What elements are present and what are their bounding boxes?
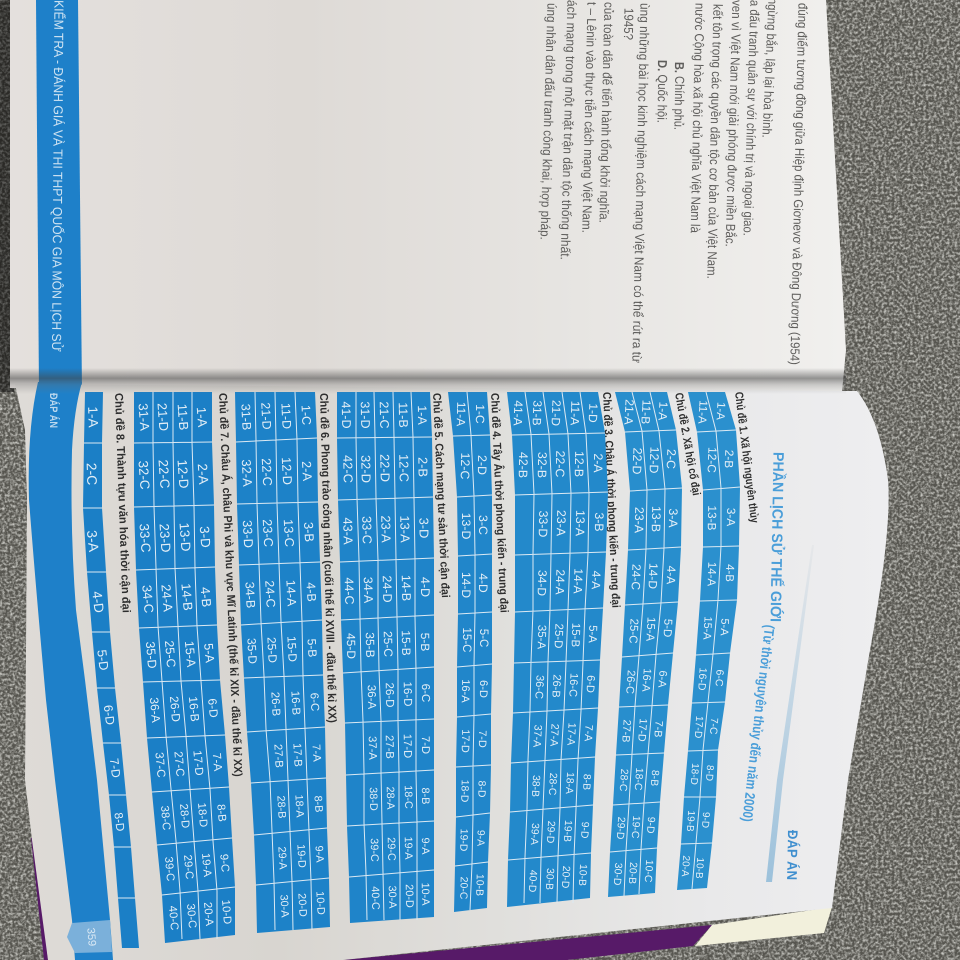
panel: topic 1 answers: 15-A [700, 616, 714, 641]
panel: topic 6 answers: 18-A [292, 794, 306, 819]
panel: topic 8 answers: 2-C [84, 463, 100, 485]
panel: topic 7 answers: 19-A [199, 853, 213, 878]
panel: topic 5 answers: 44-C [342, 577, 356, 605]
panel: topic 2 answers: 23-A [632, 507, 646, 534]
panel: topic 5 answers: 28-A [384, 786, 396, 810]
panel: topic 7 answers: 36-A [147, 697, 163, 723]
panel: topic 2 answers [608, 392, 702, 897]
panel: topic 5 answers: 40-C [369, 886, 381, 910]
panel: topic 7 answers: 26-D [167, 695, 183, 723]
upper page questions text: D. Quốc hội. [654, 60, 670, 123]
panel: topic 4 answers: 5-C [477, 629, 489, 647]
panel: topic 2 answers: 14-D [646, 563, 660, 590]
panel: topic 5 answers: 26-D [383, 682, 395, 708]
page heading: PHẦN LỊCH SỬ THẾ GIỚI [767, 452, 787, 622]
page heading [739, 452, 787, 823]
panel: topic 5 answers: 20-D [403, 884, 415, 908]
panel: topic 6 answers: 7-A [310, 744, 322, 763]
panel: topic 3 answers: 41-A [511, 400, 525, 426]
panel: topic 5 answers: 6-C [419, 684, 431, 702]
panel: topic 3 answers: 9-D [578, 821, 590, 839]
upper page side band [36, 0, 82, 392]
panel: topic 5 answers: 8-B [419, 787, 431, 805]
panel: topic 6 answers: 15-D [284, 636, 300, 663]
panel: topic 4 answers: 19-D [457, 829, 469, 852]
panel: topic 3 answers: 1-D [586, 403, 600, 423]
panel: topic 7 answers: 2-A [195, 463, 211, 485]
panel: topic 6 answers: 29-A [275, 846, 289, 871]
panel: topic 8 answers: 3-A [84, 529, 102, 553]
band label: đáp án: ĐÁP ÁN [47, 393, 60, 428]
panel: topic 5 answers: 35-B [363, 632, 377, 658]
panel: topic 5 answers: 31-D [358, 401, 372, 429]
panel: topic 7 answers: 39-C [162, 856, 176, 882]
panel: topic 3 answers: 3-B [592, 512, 606, 532]
panel: topic 8 answers: 5-D [94, 649, 112, 671]
panel: topic 4 answers: 17-D [459, 729, 471, 753]
panel: topic 3 answers: 30-B [543, 868, 555, 890]
panel: topic 6 answers: 11-D [278, 403, 294, 429]
panel: topic 5 answers: 14-B [399, 575, 413, 601]
panel: topic 7 answers: 31-A [136, 403, 152, 432]
panel: topic 5 answers [337, 392, 451, 923]
panel: topic 7 answers: 40-C [166, 905, 180, 931]
panel: topic 2 answers: 27-B [619, 719, 633, 743]
panel: topic 5 answers: 38-D [367, 787, 379, 811]
panel: topic 7 answers: 3-D [197, 526, 213, 549]
panel: topic 5 answers: 17-D [401, 734, 413, 758]
panel: topic 3 answers: 29-D [544, 820, 556, 844]
panel: topic 2 answers: 26-C [623, 670, 637, 694]
panel: topic 8 answers [83, 392, 139, 948]
panel: topic 7 answers: 20-A [201, 902, 215, 927]
panel: topic 7 answers [134, 392, 244, 943]
panel: topic 3 answers: 4-A [589, 570, 603, 590]
panel: topic 5 answers: 12-C [396, 454, 412, 482]
panel: topic 3 answers: 31-B [530, 400, 544, 426]
panel: topic 6 answers: 32-A [239, 459, 255, 487]
panel: topic 1 answers: 12-C [705, 447, 719, 474]
panel: topic 7 answers: 8-B [214, 804, 228, 822]
panel: topic 5 answers: 1-A [415, 405, 429, 426]
upper page questions text: đúng điểm tương đồng giữa Hiệp định Giơnevơ và Đông Dương (1954) [787, 3, 810, 365]
panel: topic 2 answers: 15-A [643, 617, 657, 642]
panel: topic 5 answers: 30-A [386, 885, 398, 909]
panel: topic 1 answers: 17-D [692, 715, 704, 739]
panel: topic 1 answers: 19-B [684, 810, 696, 832]
panel: topic 3 answers: 16-C [566, 673, 580, 697]
topic 2 title: Chủ đề 2. Xã hội cổ đại [672, 392, 702, 496]
panel: topic 3 answers: 36-C [532, 675, 546, 699]
panel: topic 5 answers: 45-D [344, 633, 358, 659]
panel: topic 6 answers: 16-B [288, 691, 302, 716]
panel: topic 3 answers: 19-B [561, 820, 573, 842]
panel: topic 3 answers: 25-D [552, 623, 564, 649]
panel: topic 6 answers: 26-B [268, 692, 282, 717]
panel: topic 6 answers: 24-C [262, 580, 278, 608]
panel: topic 6 answers: 10-D [313, 891, 327, 915]
panel: topic 3 answers: 14-A [571, 568, 585, 594]
upper page questions text: B. Chính phủ. [671, 62, 687, 130]
panel: topic 2 answers: 3-A [666, 508, 680, 528]
panel: topic 5 answers: 24-D [380, 575, 394, 603]
panel: topic 6 answers: 28-B [274, 795, 288, 819]
panel: topic 5 answers: 32-D [358, 455, 374, 483]
panel: topic 5 answers: 4-D [418, 577, 432, 597]
panel: topic 6 answers: 2-A [299, 461, 315, 482]
panel: topic 6 answers: 3-B [301, 522, 317, 542]
page number tab: 359 [84, 927, 98, 947]
panel: topic 4 answers: 9-A [474, 830, 486, 846]
panel: topic 3 answers: 5-A [586, 625, 598, 643]
panel: topic 4 answers: 1-C [473, 404, 487, 424]
purple book cover edge [31, 838, 712, 960]
panel: topic 2 answers: 1-A [656, 401, 670, 421]
panel: topic 6 answers: 5-B [305, 638, 319, 658]
panel: topic 7 answers: 4-B [198, 586, 214, 608]
upper page questions text: ùng những bài học kinh nghiệm cách mạng Việt Nam có thể rút ra từ [629, 3, 652, 363]
upper page questions text: ngừng bắn, lập lại hòa bình. [759, 0, 780, 138]
panel: topic 5 answers: 13-A [397, 515, 413, 543]
panel: topic 2 answers: 17-D [635, 718, 649, 742]
decorative page rule [766, 545, 814, 882]
panel: topic 3 answers: 10-B [576, 864, 588, 886]
panel: topic 3 answers: 24-A [553, 569, 567, 595]
panel: topic 7 answers: 24-A [158, 584, 176, 613]
panel: topic 8 answers: 7-D [107, 757, 123, 779]
panel: topic 2 answers: 9-D [644, 816, 656, 834]
panel: topic 3 answers: 33-D [536, 510, 550, 538]
upper page questions text: kết tôn trọng các quyền dân tộc cơ bản của Việt Nam. [704, 4, 725, 279]
band label: KIỂM TRA - ĐÁNH GIÁ VÀ THI THPT QUỐC GIA MÔN LỊCH SỬ [49, 0, 66, 352]
cream sheet under page [695, 907, 832, 946]
panel: topic 3 answers: 40-D [526, 869, 538, 893]
panel: topic 4 answers: 13-D [459, 513, 473, 539]
panel: topic 7 answers: 35-D [143, 641, 159, 669]
panel: topic 2 answers: 18-C [632, 767, 644, 791]
panel: topic 7 answers: 14-B [178, 583, 196, 611]
panel: topic 4 answers: 10-B [473, 874, 485, 896]
panel: topic 3 answers: 42-B [516, 452, 530, 478]
panel: topic 3 answers: 27-A [547, 723, 561, 747]
upper page questions text: của toàn dân để tiến hành tổng khởi nghĩa. [596, 2, 616, 223]
panel: topic 2 answers: 19-C [629, 815, 641, 839]
topic 1 title: Chủ đề 1. Xã hội nguyên thủy [732, 391, 760, 524]
panel: topic 4 answers: 14-D [459, 572, 473, 598]
panel: topic 2 answers: 10-C [642, 859, 654, 883]
panel: topic 8 answers: 4-D [89, 590, 107, 614]
panel: topic 7 answers: 33-C [137, 523, 154, 553]
panel: topic 4 answers: 4-D [476, 573, 490, 593]
panel: topic 4 answers: 2-D [475, 455, 489, 475]
panel: topic 6 answers: 22-C [259, 458, 275, 486]
panel: topic 1 answers: 2-B [722, 450, 736, 469]
book spine crease shadow [10, 368, 846, 394]
panel: topic 2 answers: 16-A [639, 668, 653, 693]
panel: topic 4 answers: 8-D [475, 780, 487, 798]
panel: topic 6 answers: 14-A [283, 579, 299, 607]
panel: topic 7 answers: 6-D [205, 698, 221, 719]
panel: topic 3 answers: 13-A [573, 510, 587, 537]
panel: topic 4 answers: 3-C [476, 515, 490, 535]
panel: topic 7 answers: 25-C [162, 640, 178, 668]
panel: topic 3 answers: 7-A [582, 724, 594, 742]
panel: topic 3 answers: 15-B [569, 623, 581, 648]
panel: topic 7 answers: 5-A [201, 643, 217, 664]
panel: topic 5 answers: 21-C [377, 401, 391, 429]
panel: topic 1 answers [677, 391, 760, 890]
upper page questions text: 1945? [621, 8, 636, 40]
panel: topic 7 answers: 17-D [190, 750, 206, 776]
panel: topic 7 answers: 30-C [184, 903, 198, 929]
panel: topic 3 answers: 28-C [546, 772, 558, 796]
panel: topic 6 answers: 8-B [312, 795, 324, 813]
panel: topic 5 answers: 5-B [418, 633, 432, 651]
panel: topic 3 answers: 26-B [549, 674, 563, 698]
panel: topic 7 answers: 28-D [177, 803, 191, 829]
upper page questions text: nước Cộng hòa xã hội chủ nghĩa Việt Nam là [688, 3, 707, 234]
panel: topic 5 answers: 3-D [416, 518, 432, 538]
upper page questions text: a đấu tranh quân sự với chính trị và ngoại giao. [741, 0, 762, 236]
panel: topic 5 answers: 9-A [419, 837, 431, 855]
panel: lower answer page [15, 382, 889, 960]
panel: topic 2 answers: 13-B [649, 506, 663, 532]
panel: topic 4 answers: 16-A [459, 679, 471, 703]
panel: topic 5 answers: 22-D [377, 454, 393, 482]
panel: topic 7 answers: 1-A [194, 406, 210, 428]
panel: topic 4 answers: 7-D [476, 730, 488, 748]
topic 3 title: Chủ đề 3. Châu Á thời phong kiến - trung đại [600, 392, 622, 608]
panel: topic 6 answers: 33-D [240, 520, 256, 548]
panel: topic 6 answers: 6-C [308, 692, 320, 712]
panel: topic 7 answers: 22-C [156, 459, 173, 489]
upper page questions text: úng nhân dân đấu tranh công khai, hợp pháp. [537, 3, 559, 240]
topic 8 title: Chủ đề 8. Thành tựu văn hóa thời cận đại [112, 393, 132, 613]
panel: topic 7 answers: 37-C [152, 752, 168, 778]
panel: topic 6 answers: 12-D [279, 457, 295, 485]
panel: topic 1 answers: 10-B [693, 857, 705, 879]
panel: topic 5 answers: 29-C [385, 837, 397, 861]
panel: topic 3 answers: 21-D [549, 400, 563, 427]
panel: topic 2 answers: 22-D [630, 447, 644, 475]
panel: topic 4 answers: 6-D [477, 680, 489, 698]
panel: topic 5 answers: 37-A [366, 736, 378, 760]
panel: topic 8 answers: 1-A [85, 406, 101, 428]
panel: topic 7 answers: 29-C [181, 854, 195, 880]
panel: upper page [10, 0, 846, 392]
panel: topic 3 answers [507, 392, 622, 907]
panel: topic 6 answers: 13-C [281, 519, 297, 547]
lower page side band [29, 382, 113, 960]
panel: topic 6 answers: 1-C [298, 405, 314, 425]
page heading: (Từ thời nguyên thủy đến năm 2000) [739, 624, 778, 823]
panel: topic 6 answers: 17-B [290, 743, 304, 767]
panel: topic 2 answers: 30-D [611, 862, 623, 886]
panel: topic 7 answers: 38-C [158, 805, 172, 831]
panel: topic 3 answers: 23-A [554, 510, 568, 537]
panel: topic 6 answers: 9-A [313, 845, 325, 864]
panel: topic 5 answers: 34-A [361, 577, 375, 604]
upper page questions text: ách mạng trong một mặt trận dân tộc thống nhất. [558, 0, 579, 260]
panel: topic 1 answers: 8-D [703, 765, 715, 781]
panel: topic 2 answers: 2-C [664, 449, 678, 469]
panel: topic 5 answers: 33-C [359, 516, 375, 544]
panel: topic 2 answers: 25-C [626, 618, 640, 644]
topic 5 title: Chủ đề 5. Cách mạng tư sản thời cận đại [430, 393, 451, 598]
panel: topic 1 answers: 7-C [707, 717, 719, 735]
panel: topic 5 answers: 23-A [378, 515, 394, 543]
panel: topic 3 answers: 22-C [553, 450, 567, 478]
panel: topic 6 answers: 4-B [304, 582, 318, 602]
topic 7 title: Chủ đề 7. Châu Á, châu Phi và khu vực Mĩ Latinh (thế kỉ XIX - đầu thế kỉ XX) [216, 393, 244, 777]
panel: topic 1 answers: 5-A [718, 618, 730, 637]
panel: topic 1 answers: 16-D [695, 667, 709, 691]
panel: topic 5 answers: 39-C [368, 838, 380, 862]
panel: topic 1 answers: 20-A [679, 855, 691, 877]
panel: topic 2 answers: 21-A [621, 399, 637, 425]
panel: topic 7 answers: 15-A [182, 640, 198, 668]
panel: topic 7 answers: 13-D [177, 522, 194, 552]
panel: topic 2 answers: 5-D [661, 618, 673, 638]
panel: topic 3 answers: 32-B [535, 452, 549, 478]
panel: topic 4 answers: 18-D [458, 780, 470, 803]
panel: topic 7 answers: 12-D [175, 459, 192, 489]
panel: topic 3 answers: 11-A [568, 401, 582, 425]
panel: topic 3 answers: 39-A [528, 823, 540, 845]
panel: topic 4 answers: 11-A [454, 402, 468, 426]
section label: đáp án: ĐÁP ÁN [784, 830, 801, 880]
panel: topic 7 answers: 21-D [155, 402, 171, 432]
topic 6 title: Chủ đề 6. Phong trào công nhân (cuối thế kỉ XVIII - đầu thế kỉ XX) [317, 393, 338, 723]
panel: topic 5 answers: 18-C [402, 785, 414, 809]
panel: topic 2 answers: 28-C [617, 768, 629, 792]
panel: topic 2 answers: 24-C [629, 564, 643, 591]
panel: topic 7 answers: 34-C [139, 584, 157, 614]
panel: topic 5 answers: 2-B [415, 457, 431, 477]
panel: topic 1 answers: 4-B [723, 564, 735, 582]
panel: topic 5 answers: 27-B [383, 735, 395, 759]
panel: topic 3 answers: 34-D [535, 570, 549, 597]
panel: topic 3 answers: 20-D [559, 865, 571, 889]
panel: topic 6 answers: 21-D [258, 402, 274, 430]
panel: topic 1 answers: 13-B [705, 505, 719, 531]
panel: topic 6 answers: 34-B [242, 581, 258, 609]
panel: topic 2 answers: 8-B [648, 770, 660, 787]
panel: topic 4 answers: 12-C [458, 452, 472, 480]
panel: topic 1 answers: 14-A [705, 562, 717, 587]
panel: topic 5 answers: 7-D [419, 736, 431, 754]
panel: topic 6 answers: 31-B [238, 403, 254, 431]
panel: topic 6 answers: 20-D [295, 893, 309, 917]
panel: topic 5 answers: 16-D [401, 681, 413, 707]
panel: topic 3 answers: 37-A [530, 724, 544, 748]
panel: topic 5 answers: 42-C [340, 455, 356, 483]
panel: topic 3 answers: 2-A [591, 453, 605, 473]
panel: topic 3 answers: 8-B [580, 774, 592, 790]
panel: topic 3 answers: 38-B [529, 775, 541, 797]
panel: topic 5 answers: 43-A [340, 517, 356, 545]
panel: topic 6 answers: 27-B [271, 744, 285, 768]
panel: topic 8 answers: 8-D [111, 812, 127, 832]
panel: topic 7 answers: 23-D [157, 523, 174, 553]
panel: topic 7 answers: 9-C [217, 853, 231, 873]
panel: topic 5 answers: 41-D [339, 401, 353, 429]
panel: topic 6 answers: 35-D [244, 638, 260, 665]
panel: topic 6 answers [235, 392, 338, 933]
panel: topic 1 answers: 18-D [688, 763, 700, 785]
upper page questions text: ven vì Việt Nam mới giải phóng được miền Bắc. [723, 0, 744, 247]
panel: topic 3 answers: 18-A [563, 772, 575, 794]
panel: topic 3 answers: 17-A [564, 722, 578, 746]
panel: topic 7 answers: 11-B [175, 403, 191, 431]
panel: topic 7 answers: 10-D [219, 899, 233, 925]
panel: topic 2 answers: 4-A [664, 565, 678, 585]
panel: topic 5 answers: 25-C [381, 631, 395, 657]
panel: topic 4 answers: 15-C [460, 628, 472, 652]
panel: topic 5 answers: 11-B [396, 402, 410, 428]
panel: topic 1 answers: 9-D [699, 812, 711, 828]
panel: topic 5 answers: 36-A [365, 685, 377, 710]
topic 4 title: Chủ đề 4. Tây Âu thời phong kiến - trung đại [488, 393, 511, 613]
panel: topic 5 answers: 10-A [419, 882, 431, 906]
panel: topic 5 answers: 19-A [402, 836, 414, 860]
panel: topic 4 answers [448, 392, 511, 912]
panel: topic 6 answers: 19-D [294, 844, 308, 868]
panel: topic 7 answers: 32-C [136, 460, 153, 490]
panel: topic 7 answers: 16-B [186, 696, 202, 722]
panel: topic 3 answers: 35-A [535, 625, 547, 650]
panel: topic 7 answers: 18-D [195, 802, 209, 828]
panel: topic 3 answers: 12-B [572, 451, 586, 477]
panel: topic 2 answers: 6-A [655, 670, 669, 689]
panel: topic 3 answers: 6-D [584, 675, 596, 693]
panel: topic 1 answers: 11-A [695, 400, 709, 424]
panel: topic 7 answers: 27-C [171, 751, 187, 777]
panel: topic 7 answers: 7-A [210, 752, 224, 772]
panel: topic 2 answers: 29-D [614, 816, 626, 840]
page number tab [67, 920, 112, 953]
panel: topic 1 answers: 1-A [714, 402, 726, 421]
panel: topic 6 answers: 30-A [277, 894, 291, 919]
panel: topic 1 answers: 3-A [724, 508, 738, 526]
panel: topic 6 answers: 25-D [264, 637, 280, 664]
panel: topic 1 answers: 6-C [712, 669, 726, 687]
panel: topic 2 answers: 12-D [647, 446, 661, 474]
panel: topic 2 answers: 7-B [651, 720, 665, 738]
upper page questions text [537, 0, 810, 365]
panel: topic 2 answers: 20-B [626, 862, 638, 884]
panel: topic 4 answers: 20-C [457, 877, 469, 900]
panel: topic 8 answers: 6-D [101, 704, 117, 726]
panel: topic 2 answers: 11-B [638, 399, 654, 425]
panel: topic 5 answers: 15-B [399, 630, 413, 656]
upper page questions text: t – Lênin vào thực tiễn cách mạng Việt Nam. [579, 2, 599, 233]
panel: topic 6 answers: 23-C [260, 519, 276, 547]
